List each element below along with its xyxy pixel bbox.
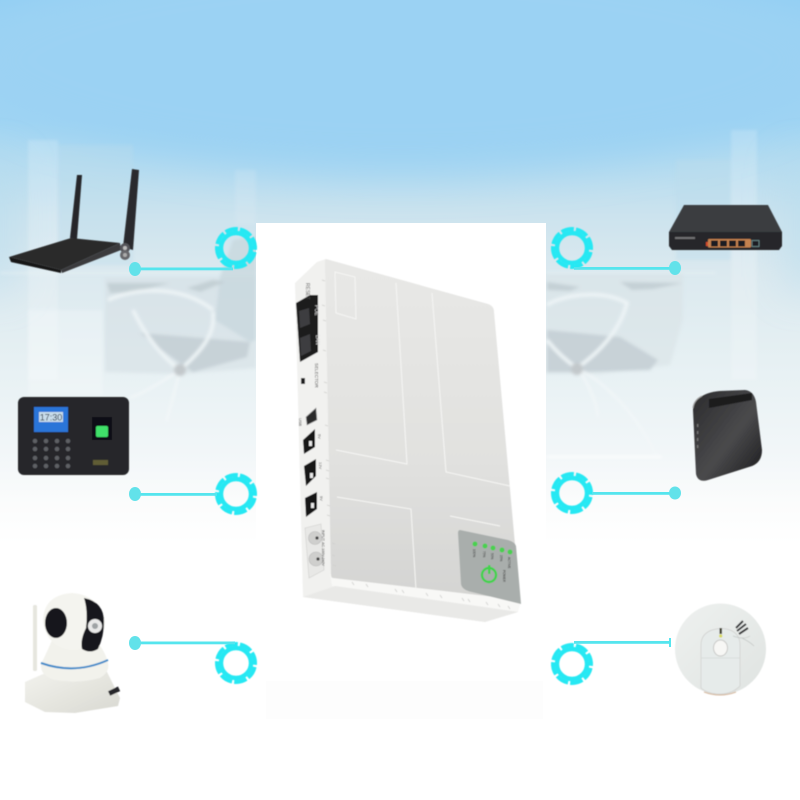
UPS status panel: 50% (490, 553, 494, 560)
clock screen (34, 407, 68, 432)
background: right chair (546, 274, 683, 458)
clock time readout (39, 412, 63, 422)
UPS top face (325, 259, 520, 600)
UPS status panel: POWER (502, 570, 506, 583)
UPS port labels: 12V (318, 462, 323, 469)
UPS status panel: 25% (499, 555, 503, 562)
background: left chair (105, 236, 256, 422)
icon: PoE network switch (669, 205, 782, 250)
UPS RJ45 ports (296, 295, 318, 362)
icon: wireless router (9, 169, 139, 273)
UPS port labels: 9V (319, 496, 324, 501)
UPS status panel: 100% (472, 549, 476, 557)
UPS port labels (298, 283, 325, 567)
connector: top-right ring and line (549, 225, 681, 275)
UPS status panel: 75% (482, 551, 486, 558)
icon: wireless IP camera (25, 593, 120, 713)
faint reflection below the device (266, 681, 543, 719)
UPS status panel: ACTIVE (507, 557, 511, 569)
fingerprint sensor (92, 417, 112, 440)
UPS USB port (306, 408, 317, 425)
UPS face panel seams (335, 272, 510, 590)
UPS port labels: INPUT: AC 100V-240V (321, 530, 325, 567)
UPS DC outlet holes (309, 441, 314, 508)
icon: fingerprint time clock: 17:30 (40, 412, 62, 422)
central mini UPS device (295, 259, 521, 622)
connector: middle-right ring and line (549, 470, 681, 516)
UPS status panel (458, 530, 521, 604)
connector: top-left ring and line (129, 225, 259, 276)
UPS port labels: USB (298, 418, 303, 427)
connector: bottom-right ring and line (549, 638, 671, 687)
UPS DC outlets (303, 429, 317, 517)
icon: modem (693, 390, 762, 481)
UPS front and bottom edge (295, 259, 518, 622)
UPS RJ45 labels: POE (313, 305, 319, 316)
icon: smoke detector (675, 604, 766, 695)
icon: fingerprint time clock (18, 397, 129, 475)
connector: middle-left ring and line (129, 471, 259, 517)
clock keypad (33, 439, 70, 468)
UPS port labels: RESET (304, 283, 310, 300)
UPS power inlet (305, 524, 324, 578)
green sensor light (96, 426, 108, 437)
UPS port labels: SELECTOR (314, 363, 319, 388)
UPS RJ45 labels: LAN (314, 335, 320, 345)
UPS RJ45 labels (313, 305, 320, 345)
clock brand mark (93, 460, 108, 465)
UPS selector switch (301, 378, 305, 384)
connector: bottom-left ring and line (129, 636, 259, 686)
white centre panel (256, 223, 546, 800)
UPS port labels: 5V (317, 434, 322, 439)
UPS side vents (322, 280, 510, 609)
